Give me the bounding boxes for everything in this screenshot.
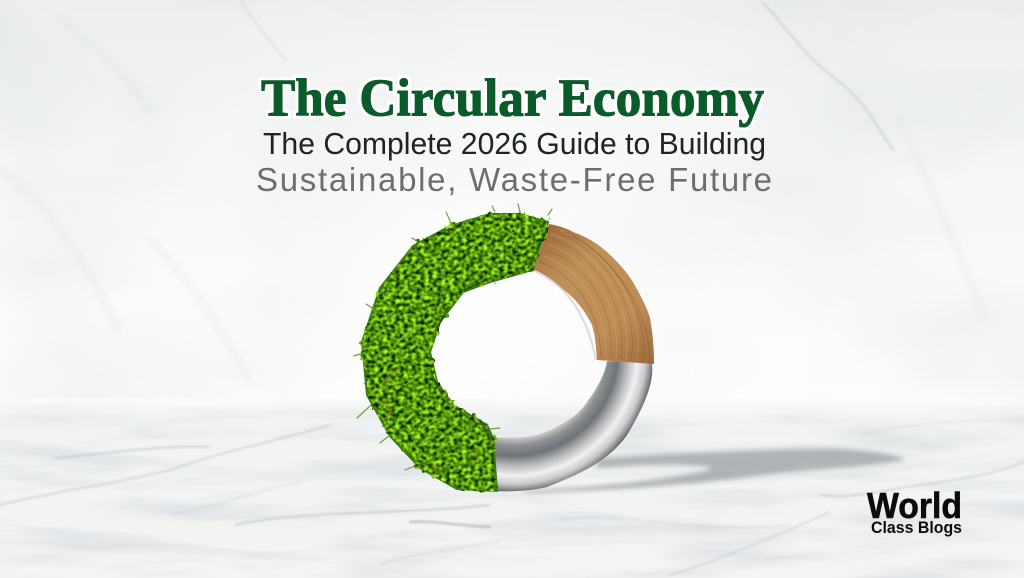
moss section (354, 204, 552, 491)
logo word: World: World (867, 485, 962, 526)
wood section (533, 224, 654, 364)
subtitle line two: Sustainable, Waste-Free Future (256, 161, 772, 198)
logo: World Class Blogs (867, 485, 962, 537)
ring object (354, 204, 654, 491)
marble wall background (0, 0, 1024, 402)
marble table surface (0, 398, 1024, 578)
ring cast shadow (520, 449, 905, 493)
title block (256, 70, 772, 198)
title: The Circular Economy: The Circular Economy (261, 70, 764, 128)
logo words: Class Blogs: Class Blogs (871, 519, 962, 537)
steel tube section (489, 361, 652, 491)
subtitle line one: The Complete 2026 Guide to Building (263, 126, 766, 161)
